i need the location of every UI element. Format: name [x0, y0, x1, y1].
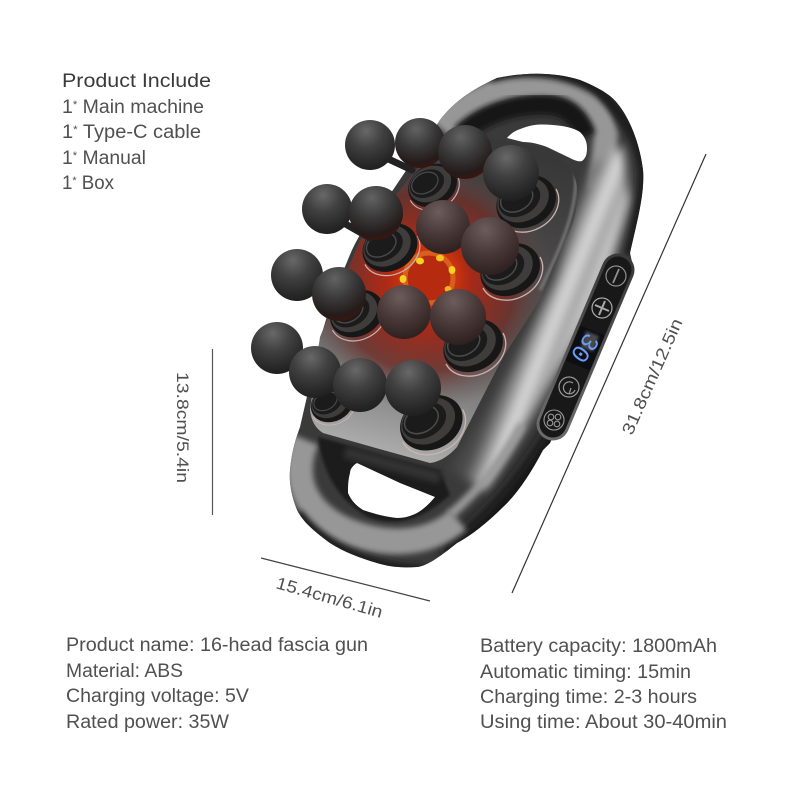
bottom handle recess	[318, 437, 450, 522]
title: product include list: Product Include	[62, 71, 211, 92]
top handle hole	[507, 124, 587, 161]
dimension: length	[512, 154, 706, 593]
top handle band	[440, 84, 606, 190]
specifications: right column: Charging time: 2-3 hours	[480, 687, 697, 708]
specifications: left column	[66, 635, 368, 733]
right rail highlights	[450, 145, 630, 490]
massager device	[251, 71, 644, 572]
title: product include list: Manual	[77, 148, 146, 169]
massage face plate	[310, 162, 577, 463]
dimension: thickness: 13.8cm/5.4in	[173, 372, 192, 483]
title: product include list	[62, 71, 211, 194]
specifications: right column: Battery capacity: 1800mAh	[480, 636, 717, 657]
title: product include list: *	[73, 124, 78, 136]
massage head sockets	[304, 155, 565, 461]
specifications: right column	[480, 636, 727, 733]
title: product include list: 1	[62, 173, 73, 194]
specifications: left column: Material: ABS	[66, 661, 183, 682]
timer display: 30	[563, 326, 604, 368]
icon: plus button	[592, 298, 612, 318]
specifications: right column: Using time: About 30-40min	[480, 712, 727, 733]
dimension: width: 15.4cm/6.1in	[274, 574, 385, 622]
title: product include list: 1	[62, 122, 73, 143]
title: product include list: Type-C cable	[78, 122, 201, 143]
lower rail dark	[450, 428, 566, 560]
bottom handle hole	[348, 463, 435, 518]
dimension: length: 31.8cm/12.5in	[618, 316, 686, 438]
dimension: width	[261, 558, 430, 622]
massage heads	[251, 118, 539, 416]
title: product include list: Box	[77, 173, 114, 194]
control panel	[544, 266, 626, 430]
icon: mode button	[544, 410, 564, 430]
specifications: right column: Automatic timing: 15min	[480, 662, 691, 683]
specifications: left column: Charging voltage: 5V	[66, 686, 249, 707]
title: product include list: *	[73, 150, 78, 162]
specifications: left column: Rated power: 35W	[66, 712, 229, 733]
title: product include list: 1	[62, 97, 73, 118]
bottom handle band	[300, 440, 458, 541]
device body with handles	[290, 71, 644, 572]
title: product include list: Main machine	[77, 97, 204, 118]
stems to outer heads	[285, 155, 412, 385]
icon: power button	[559, 377, 579, 397]
title: product include list: *	[72, 175, 77, 187]
title: product include list: *	[73, 99, 78, 111]
heated centre ring with lights	[397, 242, 461, 312]
icon: minus button	[606, 266, 626, 286]
title: product include list: 1	[62, 148, 73, 169]
specifications: left column: Product name: 16-head fascia gun	[66, 635, 368, 656]
